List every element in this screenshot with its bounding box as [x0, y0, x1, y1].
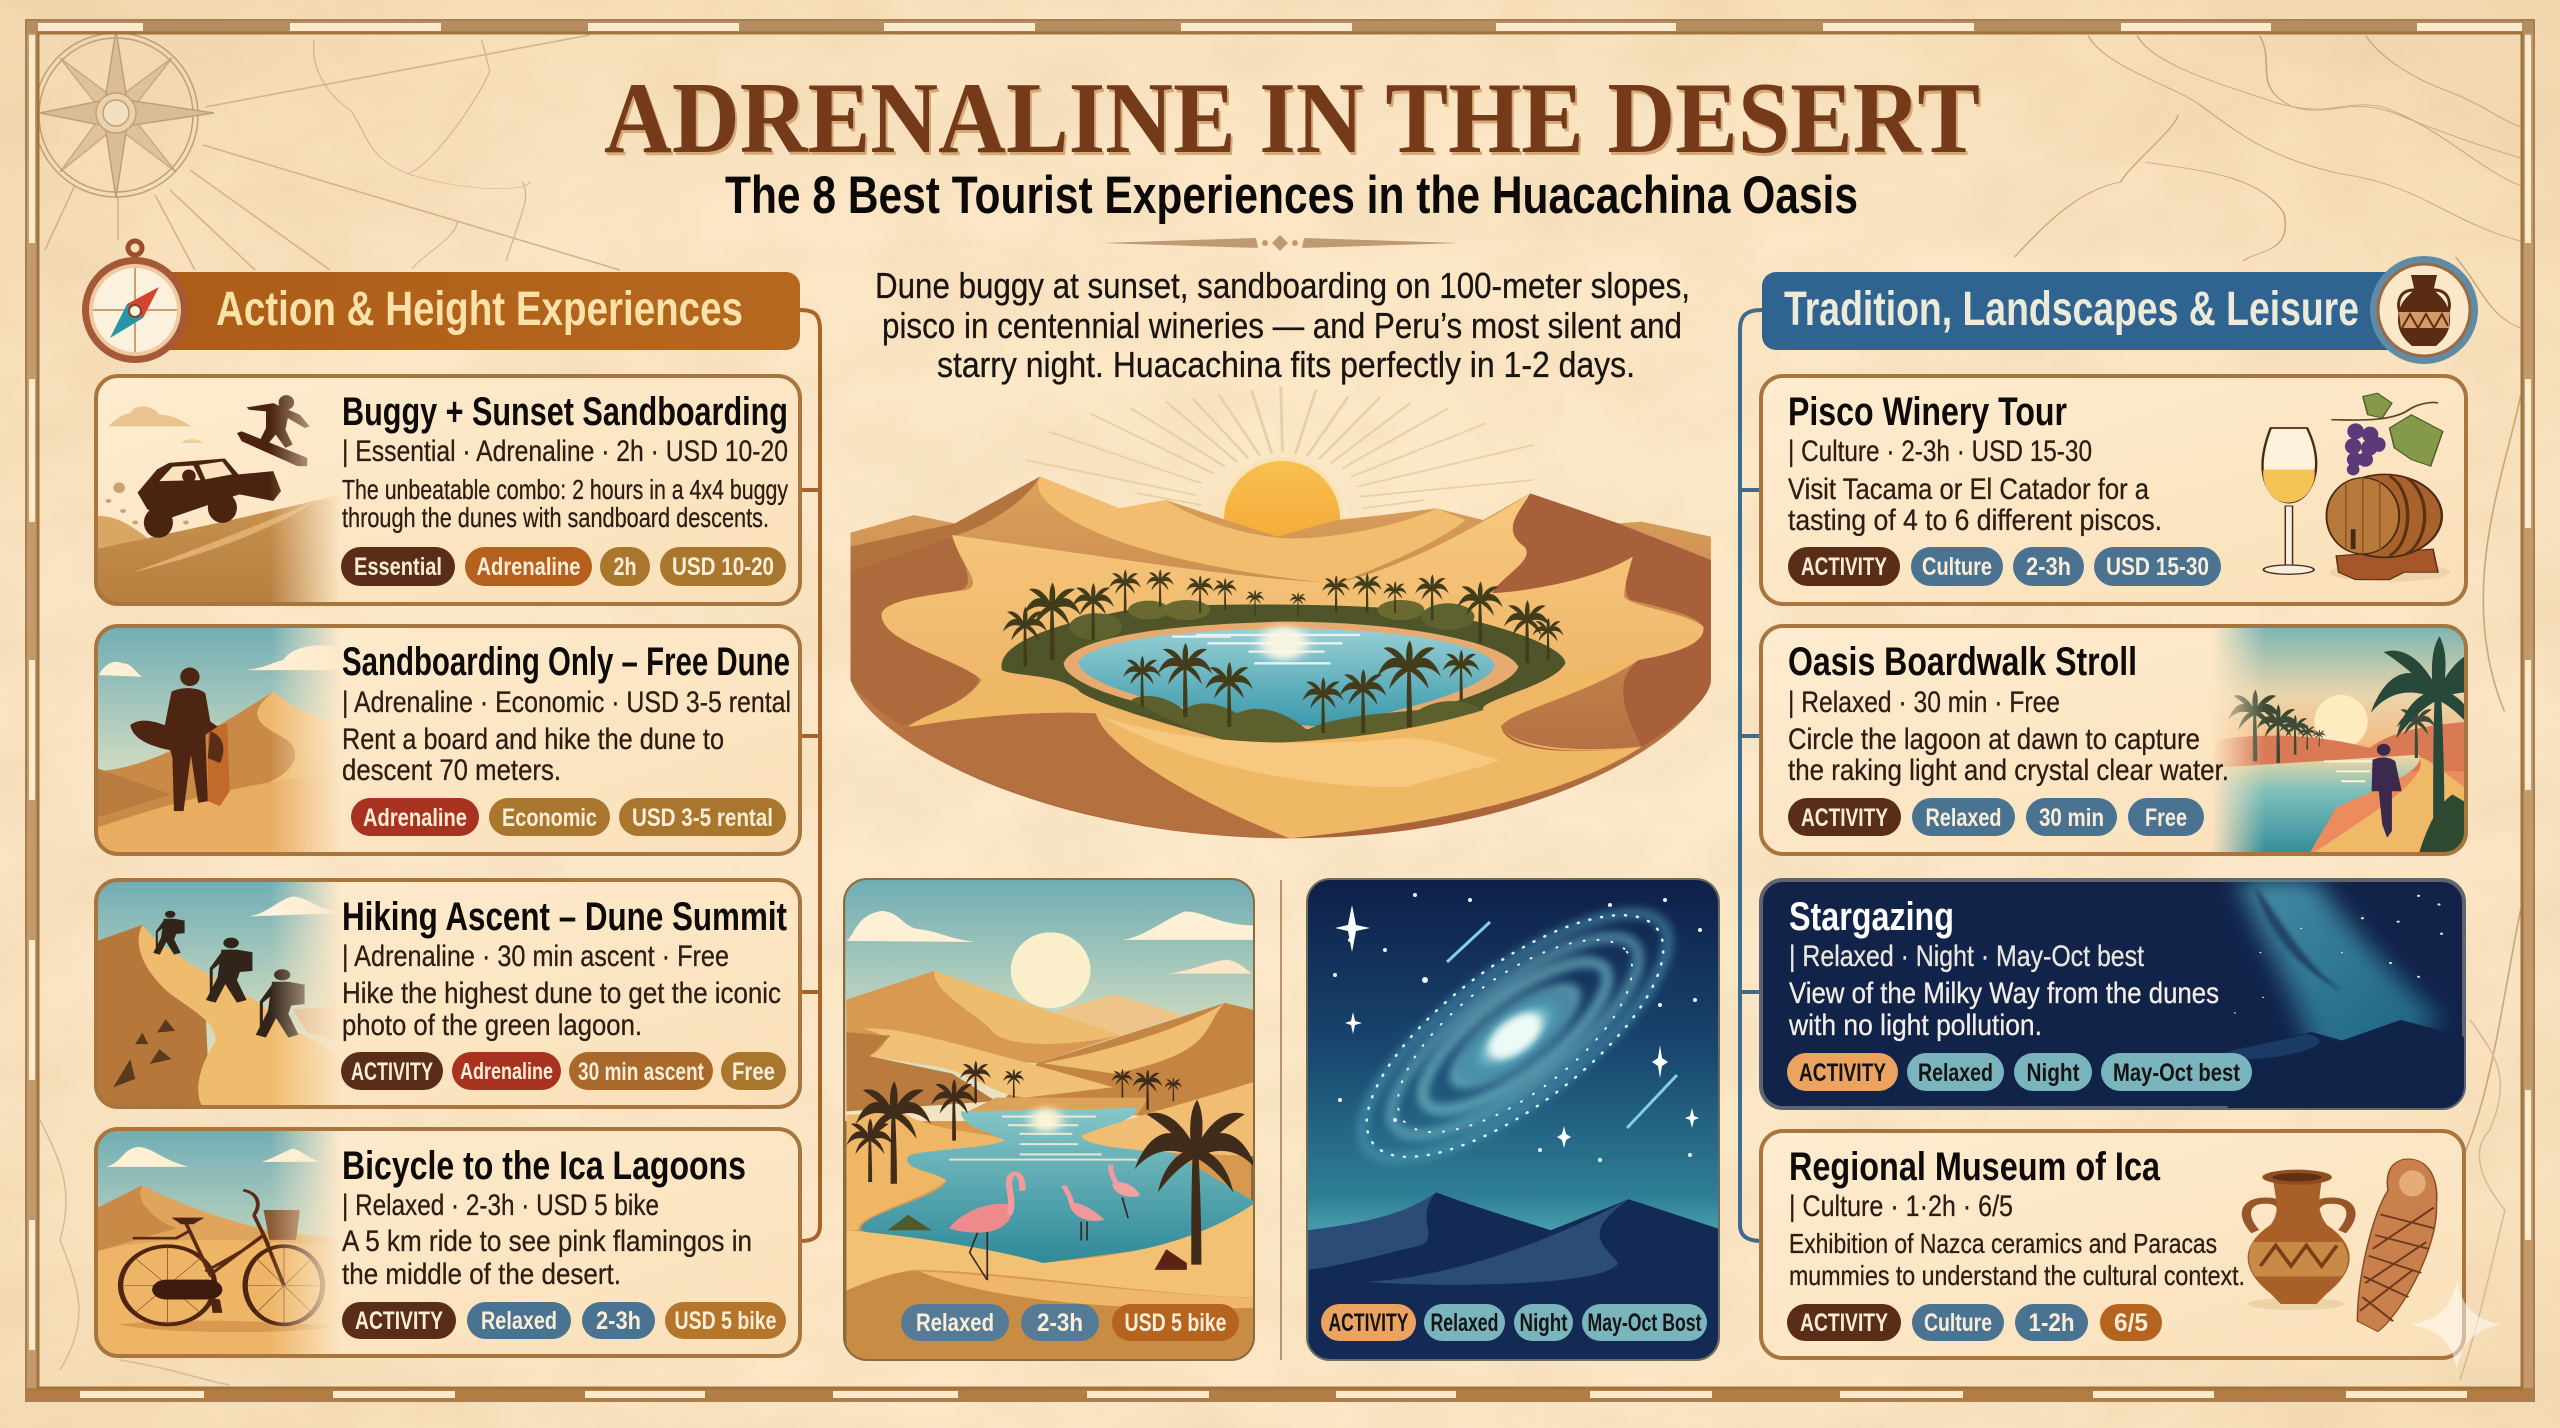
tags: Culture: [1922, 553, 1992, 581]
card: pisco winery tour: [1761, 376, 2466, 604]
tags: Relaxed: [1430, 1309, 1498, 1337]
icon: amphora: [2370, 256, 2478, 364]
sun rays: [1025, 387, 1533, 508]
description: View of the Milky Way from the dunes: [1789, 977, 2219, 1010]
meta line: | Relaxed · Night · May-Oct best: [1789, 940, 2145, 973]
description: [342, 977, 781, 1042]
tags: 2-3h: [2026, 553, 2071, 581]
description: Hike the highest dune to get the iconic: [342, 977, 781, 1010]
card: sandboarding only: [96, 625, 800, 858]
card: regional museum of ica: [1761, 1131, 2464, 1358]
title divider: [1102, 235, 1458, 251]
tags: [1788, 798, 2204, 836]
illustration: sunset walk by the lagoon: [2210, 625, 2505, 858]
description: the middle of the desert.: [342, 1258, 621, 1291]
hero illustration: oasis among dunes at sunrise: [851, 387, 1711, 838]
meta line: | Culture · 1·2h · 6/5: [1789, 1190, 2013, 1223]
description: Circle the lagoon at dawn to capture: [1788, 723, 2200, 756]
tags: USD 3-5 rental: [632, 804, 773, 832]
icon: compass: [82, 241, 188, 363]
right connector line: [1740, 310, 1762, 1241]
description: mummies to understand the cultural context.: [1789, 1260, 2245, 1291]
tags: Essential: [354, 553, 442, 581]
card: oasis boardwalk stroll: [1761, 625, 2505, 858]
description: [1788, 977, 2219, 1042]
panel heading: tradition, landscapes and leisure: Tradition, Landscapes & Leisure: [1784, 283, 2359, 336]
description: Exhibition of Nazca ceramics and Paracas: [1789, 1228, 2217, 1259]
description: Visit Tacama or El Catador for a: [1788, 473, 2149, 506]
description: Rent a board and hike the dune to: [342, 723, 724, 756]
illustration: milky way above dunes: [2225, 880, 2464, 1111]
meta line: | Relaxed · 30 min · Free: [1788, 686, 2060, 719]
illustration: nazca vase and paracas mummy: [2246, 1159, 2437, 1331]
title: ADRENALINE IN THE DESERT: [604, 62, 1980, 175]
tags: Adrenaline: [363, 804, 467, 832]
intro text: Dune buggy at sunset, sandboarding on 100-meter slopes,: [875, 265, 1690, 306]
panel heading: action and height experiences: Action & Height Experiences: [216, 283, 743, 336]
tags: May-Oct Bost: [1588, 1309, 1702, 1337]
tags: USD 5 bike: [1124, 1309, 1227, 1337]
tags: Relaxed: [916, 1309, 994, 1337]
palm trees: [1003, 569, 1564, 733]
intro text: pisco in centennial wineries — and Peru’s most silent and: [882, 305, 1682, 346]
illustration: hikers on dune: [96, 878, 346, 1110]
description: [1788, 473, 2162, 537]
tags: 2-3h: [596, 1307, 641, 1335]
tags: Culture: [1924, 1309, 1992, 1337]
card: buggy and sunset sandboarding: [96, 376, 800, 605]
card heading: Bicycle to the Ica Lagoons: [342, 1144, 746, 1188]
tags: [1787, 1053, 2252, 1091]
meta line: | Adrenaline · 30 min ascent · Free: [342, 940, 729, 973]
tags: Adrenaline: [460, 1058, 553, 1084]
tags: 2-3h: [1037, 1309, 1083, 1337]
illustration: sandboarder on dune: [96, 625, 346, 858]
subtitle: The 8 Best Tourist Experiences in the Huacachina Oasis: [725, 166, 1858, 225]
description: through the dunes with sandboard descents.: [342, 502, 769, 533]
tags: 6/5: [2114, 1309, 2148, 1337]
description: tasting of 4 to 6 different piscos.: [1788, 504, 2162, 537]
tags: ACTIVITY: [1801, 553, 1887, 581]
decorative map lines top left: [45, 35, 620, 270]
tags: USD 5 bike: [674, 1307, 777, 1335]
tags: 30 min ascent: [578, 1058, 705, 1086]
illustration: wine glass, grapes and barrel: [2263, 393, 2450, 582]
intro text: starry night. Huacachina fits perfectly in 1-2 days.: [937, 344, 1635, 385]
description: [1789, 1228, 2245, 1291]
meta line: | Relaxed · 2-3h · USD 5 bike: [342, 1189, 659, 1222]
tags: ACTIVITY: [1799, 1059, 1886, 1087]
illustration: milky way galaxy: [1308, 869, 1718, 1363]
description: [342, 1225, 752, 1291]
tags: 2h: [614, 553, 636, 581]
intro text: [875, 265, 1690, 385]
description: [342, 474, 788, 533]
tags: Relaxed: [1926, 804, 2002, 832]
description: the raking light and crystal clear water.: [1788, 754, 2229, 787]
photo panel: galaxy over dunes: [1308, 869, 1718, 1363]
dunes behind the oasis: [851, 477, 1711, 838]
tags: ACTIVITY: [1328, 1309, 1409, 1337]
tags: May-Oct best: [2113, 1059, 2241, 1087]
card: hiking ascent: [96, 878, 800, 1110]
left connector line: [800, 310, 820, 1241]
description: [342, 723, 724, 787]
card outlines: left column: [96, 376, 800, 1356]
tags: [341, 1052, 786, 1090]
card: stargazing: [1761, 880, 2464, 1111]
foreground dune: [908, 660, 1642, 838]
sun: [1220, 457, 1344, 581]
tags: 1-2h: [2028, 1309, 2074, 1337]
tags: USD 15-30: [2106, 553, 2209, 581]
tags: [1787, 1304, 2162, 1341]
description: [1788, 723, 2229, 787]
watermark sparkle: [2411, 1280, 2501, 1369]
tags: Night: [2026, 1059, 2080, 1087]
panel heading: action and height experiences: [147, 272, 800, 350]
illustration: lagoon with flamingos: [845, 880, 1257, 1363]
meta line: | Essential · Adrenaline · 2h · USD 10-20: [342, 435, 788, 468]
tags: [901, 1304, 1239, 1341]
tags: ACTIVITY: [1800, 1309, 1888, 1337]
illustration: bicycle in desert: [96, 1127, 346, 1359]
card heading: Sandboarding Only – Free Dune: [342, 640, 790, 684]
tags: ACTIVITY: [1801, 804, 1888, 832]
card heading: Pisco Winery Tour: [1788, 390, 2067, 434]
card heading: Stargazing: [1789, 895, 1954, 939]
tags: Night: [1520, 1309, 1568, 1337]
tags: ACTIVITY: [355, 1307, 443, 1335]
decorative lines lower edges: [40, 1020, 2505, 1385]
description: photo of the green lagoon.: [342, 1009, 642, 1042]
card outline: [1761, 626, 2466, 854]
tags: [1788, 547, 2221, 586]
tags: Free: [732, 1058, 775, 1086]
description: A 5 km ride to see pink flamingos in: [342, 1225, 752, 1258]
description: descent 70 meters.: [342, 754, 561, 787]
card: bicycle to ica lagoons: [96, 1127, 800, 1359]
compass rose emblem: [34, 30, 214, 198]
illustration: buggy and sandboarder: [96, 395, 341, 605]
panel heading: tradition, landscapes and leisure: [1762, 272, 2422, 350]
decorative topographic lines top right: [2015, 36, 2521, 1225]
tags: USD 10-20: [672, 553, 774, 581]
tags: [341, 547, 786, 586]
tags: Relaxed: [481, 1307, 557, 1335]
meta line: | Culture · 2-3h · USD 15-30: [1788, 435, 2092, 468]
tags: Relaxed: [1918, 1059, 1993, 1087]
tags: [342, 1302, 786, 1339]
tags: ACTIVITY: [351, 1058, 433, 1086]
description: The unbeatable combo: 2 hours in a 4x4 buggy: [342, 474, 788, 505]
tags: Adrenaline: [476, 553, 581, 581]
tags: Free: [2145, 804, 2187, 832]
meta line: | Adrenaline · Economic · USD 3-5 rental: [342, 686, 791, 719]
tags: [351, 798, 786, 836]
card heading: Regional Museum of Ica: [1789, 1145, 2161, 1189]
description: with no light pollution.: [1788, 1009, 2042, 1042]
center divider: [1280, 880, 1282, 1360]
card heading: Hiking Ascent – Dune Summit: [342, 895, 787, 939]
tags: Economic: [502, 804, 597, 832]
card heading: Buggy + Sunset Sandboarding: [342, 390, 788, 434]
tags: [1321, 1304, 1707, 1341]
tags: 30 min: [2039, 804, 2104, 832]
photo panel: flamingo lagoon: [845, 880, 1257, 1363]
card heading: Oasis Boardwalk Stroll: [1788, 640, 2137, 684]
